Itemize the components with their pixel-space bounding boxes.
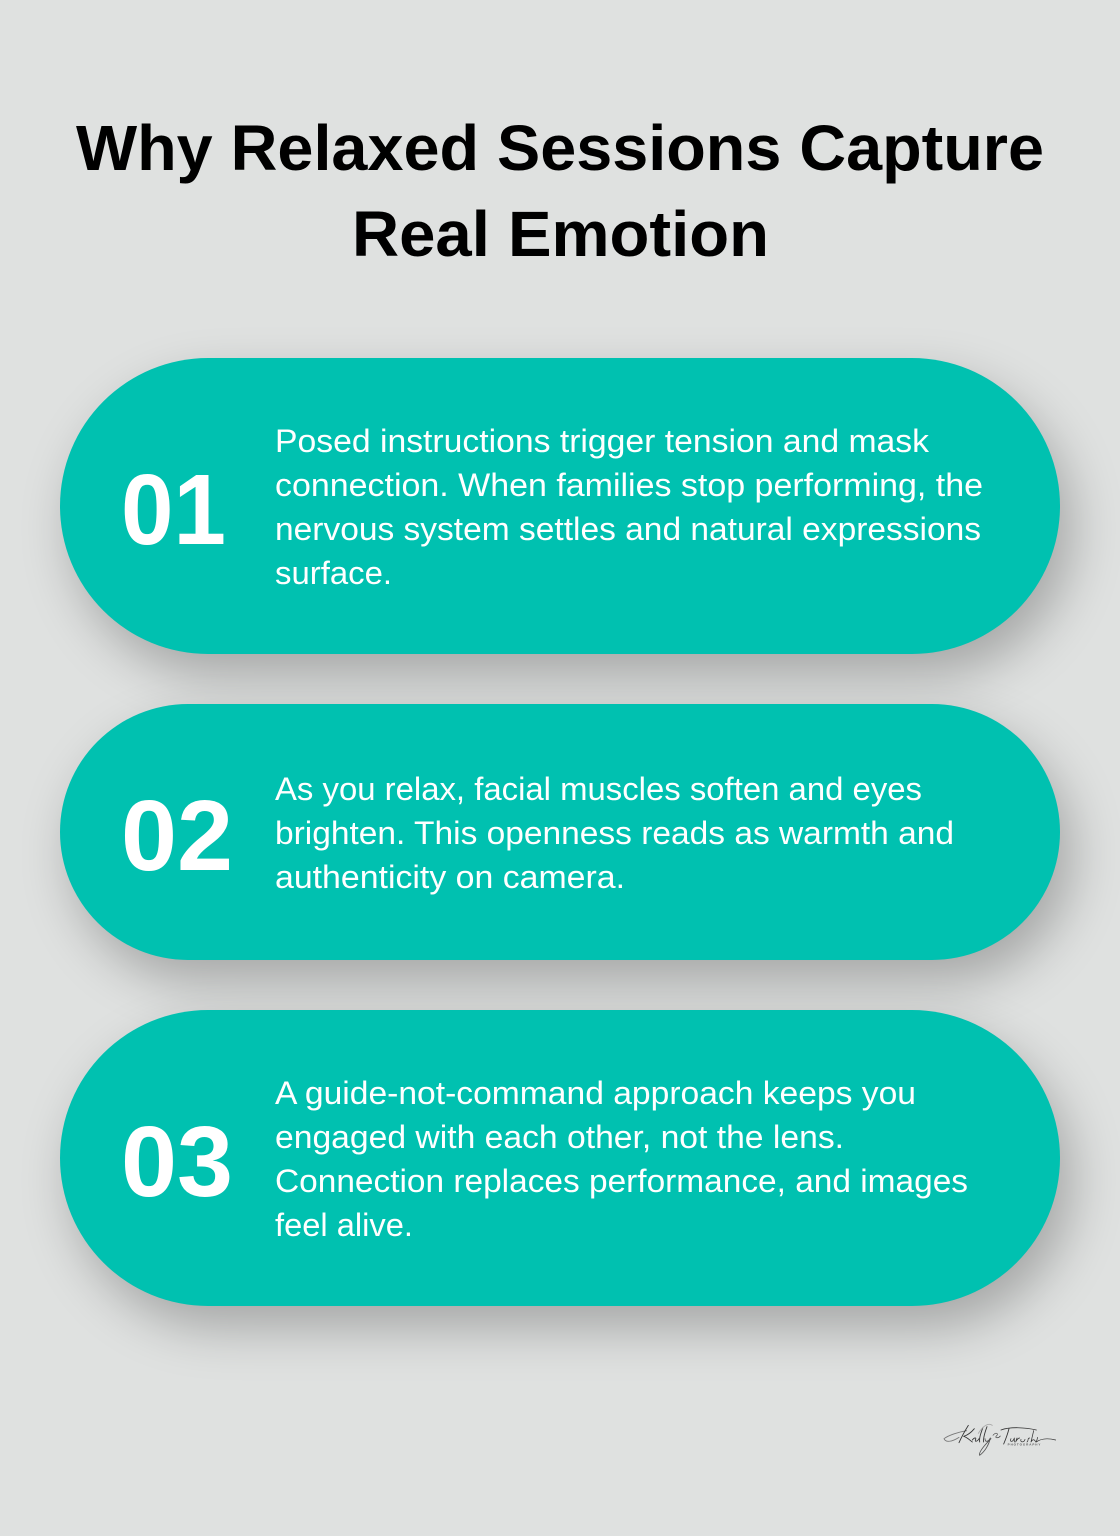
title: Real Emotion [352,198,769,270]
number: 01: 01 [121,454,226,566]
number: 03: 03 [121,1106,233,1218]
text block: step 01 description: surface. [275,555,392,591]
text block: step 03 description [275,1075,968,1243]
text block: step 03 description: A guide-not-command approach keeps you [275,1075,916,1111]
panel: step 03 [60,1010,1060,1306]
text block: step 02 description: brighten. This openness reads as warmth and [275,815,954,851]
text block: step 01 description: connection. When families stop performing, the [275,467,983,503]
title: Why Relaxed Sessions Capture [76,112,1044,184]
logo text: PHOTOGRAPHY [1008,1443,1041,1447]
number: 02: 02 [121,780,233,892]
panel: step 02 [60,704,1060,960]
text block: step 02 description: As you relax, facial muscles soften and eyes [275,771,922,807]
text block: step 03 description: feel alive. [275,1207,413,1243]
text block: step 02 description: authenticity on camera. [275,859,625,895]
text block: step 02 description [275,771,954,895]
text block: step 01 description: Posed instructions trigger tension and mask [275,423,930,459]
title [76,112,1044,270]
logo: signature [944,1424,1056,1456]
panel: step 01 [60,358,1060,654]
text block: step 01 description [275,423,983,591]
text block: step 03 description: engaged with each other, not the lens. [275,1119,844,1155]
text block: step 01 description: nervous system settles and natural expressions [275,511,981,547]
text block: step 03 description: Connection replaces performance, and images [275,1163,968,1199]
